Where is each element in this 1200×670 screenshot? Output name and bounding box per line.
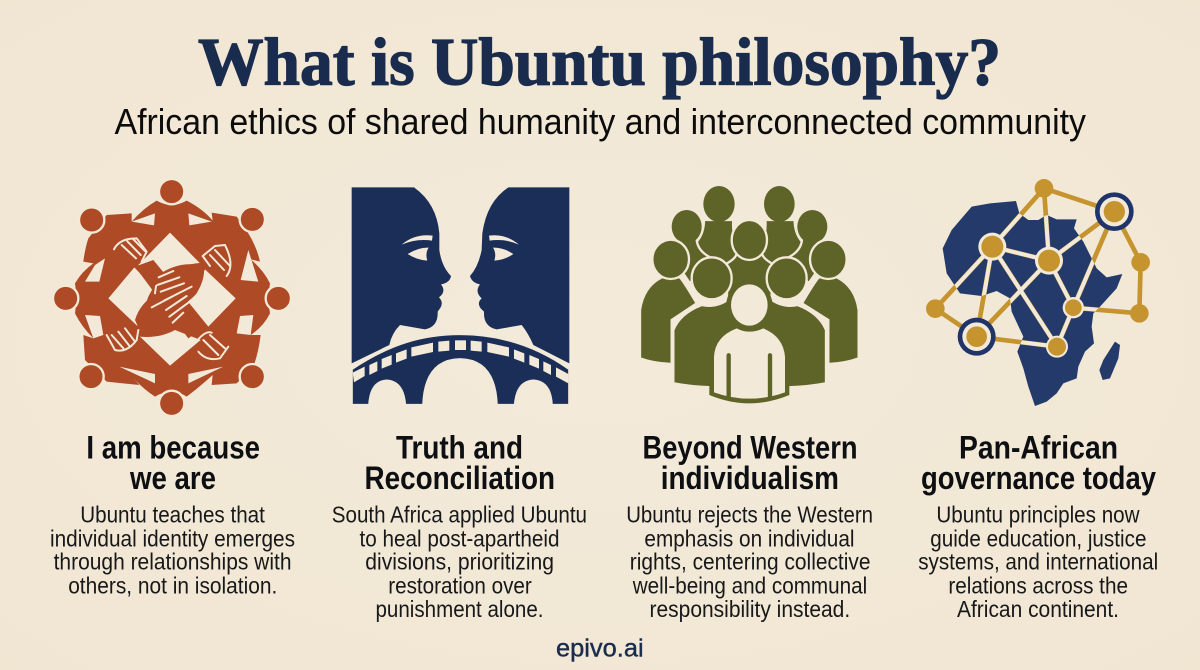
eyes and brows xyxy=(402,235,519,261)
description 3: rights, centering collective xyxy=(630,549,870,575)
heading: Beyond Western individualism xyxy=(642,429,858,496)
central clasped hands xyxy=(135,260,207,338)
network links xyxy=(935,188,1141,347)
footer brand: epivo.ai xyxy=(556,635,644,663)
description 1: through relationships with xyxy=(54,549,291,575)
Madagascar xyxy=(1099,342,1120,380)
description 3: Ubuntu rejects the Western xyxy=(626,501,873,527)
heads xyxy=(53,179,291,416)
description 3 xyxy=(626,501,873,622)
heading: I am because we are: I am because xyxy=(86,429,260,465)
left face xyxy=(352,187,451,363)
heading: I am because we are xyxy=(86,429,260,496)
title: What is Ubuntu philosophy? xyxy=(198,24,1001,100)
description 4: African continent. xyxy=(957,596,1119,622)
description 4 xyxy=(918,501,1158,622)
heading: Truth and Reconciliation: Truth and xyxy=(396,429,523,465)
heading: I am because we are: we are xyxy=(129,460,216,496)
description 4: Ubuntu principles now xyxy=(936,501,1140,527)
description 1: others, not in isolation. xyxy=(68,572,277,598)
description 4: guide education, justice xyxy=(930,525,1146,551)
gaps between figures xyxy=(85,213,258,383)
description 1 xyxy=(50,501,295,598)
bridge xyxy=(352,334,569,405)
icon: individual in front of a crowd xyxy=(640,186,859,405)
heading: Pan-African governance today: Pan-African xyxy=(959,429,1118,465)
column 4 text xyxy=(918,429,1158,622)
heading: Truth and Reconciliation: Reconciliation xyxy=(364,460,555,496)
description 4: relations across the xyxy=(948,572,1128,598)
heading: Beyond Western individualism: Beyond Western xyxy=(642,429,858,465)
description 2: to heal post-apartheid xyxy=(360,525,560,551)
Africa shape xyxy=(943,201,1122,406)
back row xyxy=(672,186,827,303)
icon: Africa network map xyxy=(926,179,1150,406)
column 3 text xyxy=(626,429,873,622)
icon: circle of people joining hands xyxy=(53,179,291,416)
front figure xyxy=(709,282,790,405)
ring of figures xyxy=(75,201,270,397)
description 2 xyxy=(332,501,587,622)
description 4: systems, and international xyxy=(918,549,1158,575)
description 2: punishment alone. xyxy=(376,596,544,622)
subtitle: African ethics of shared humanity and interconnected community xyxy=(114,101,1087,142)
heading: Pan-African governance today: governance today xyxy=(921,460,1156,496)
network nodes xyxy=(926,179,1150,358)
links over the continent xyxy=(954,213,1099,348)
description 3: well-being and communal xyxy=(632,572,867,598)
side figures xyxy=(640,240,859,364)
description 3: responsibility instead. xyxy=(650,596,850,622)
right face xyxy=(470,187,569,363)
heading: Truth and Reconciliation xyxy=(364,429,555,496)
description 1: Ubuntu teaches that xyxy=(80,501,265,527)
description 2: restoration over xyxy=(388,572,532,598)
bridge windows xyxy=(353,340,568,383)
description 3: emphasis on individual xyxy=(644,525,854,551)
description 1: individual identity emerges xyxy=(50,525,295,551)
description 2: divisions, prioritizing xyxy=(365,549,554,575)
icon: two faces over a bridge xyxy=(352,187,569,405)
column 2 text xyxy=(332,429,587,622)
column 1 text xyxy=(50,429,295,598)
description 2: South Africa applied Ubuntu xyxy=(332,501,587,527)
outer hands xyxy=(107,238,230,359)
middle figures xyxy=(673,257,826,390)
heading: Pan-African governance today xyxy=(921,429,1156,496)
heading: Beyond Western individualism: individualism xyxy=(661,460,839,496)
